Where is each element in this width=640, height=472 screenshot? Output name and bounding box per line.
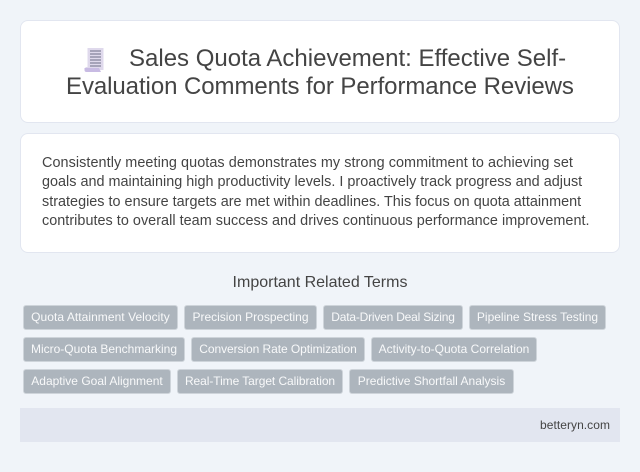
summary text: goals and maintaining high productivity levels. I proactively track progress and adjust xyxy=(42,174,582,190)
tag: Activity-to-Quota Correlation xyxy=(379,342,529,356)
tag xyxy=(23,369,171,394)
tag: Real-Time Target Calibration xyxy=(185,374,335,388)
tag group xyxy=(23,305,606,394)
footer source: betteryn.com xyxy=(540,418,610,432)
tag: Quota Attainment Velocity xyxy=(31,310,170,324)
tag xyxy=(23,337,185,362)
summary text xyxy=(42,155,590,229)
heading: related terms: Important Related Terms xyxy=(233,274,407,291)
title line 1: Sales Quota Achievement: Effective Self- xyxy=(129,45,566,72)
panel: title card xyxy=(20,20,620,123)
summary text: contributes to overall team success and drives continuous performance improvement. xyxy=(42,213,590,229)
summary text: strategies to ensure targets are met within deadlines. This focus on quota attainment xyxy=(42,194,581,210)
tag: Precision Prospecting xyxy=(192,310,309,324)
tag xyxy=(371,337,537,362)
footer bar xyxy=(20,408,620,442)
summary text: Consistently meeting quotas demonstrates my strong commitment to achieving set xyxy=(42,155,573,171)
tag: Pipeline Stress Testing xyxy=(477,310,598,324)
panel: summary card xyxy=(20,133,620,253)
tag xyxy=(323,305,463,330)
tag xyxy=(23,305,178,330)
tag xyxy=(191,337,365,362)
tag xyxy=(349,369,514,394)
tag: Conversion Rate Optimization xyxy=(199,342,357,356)
tag xyxy=(469,305,606,330)
icon: scroll document xyxy=(84,48,104,72)
tag: Micro-Quota Benchmarking xyxy=(31,342,177,356)
tag xyxy=(177,369,343,394)
title line 2: Evaluation Comments for Performance Reviews xyxy=(66,73,574,100)
tag xyxy=(184,305,317,330)
tag: Data-Driven Deal Sizing xyxy=(331,310,455,324)
tag: Adaptive Goal Alignment xyxy=(31,374,163,388)
tag: Predictive Shortfall Analysis xyxy=(358,374,505,388)
